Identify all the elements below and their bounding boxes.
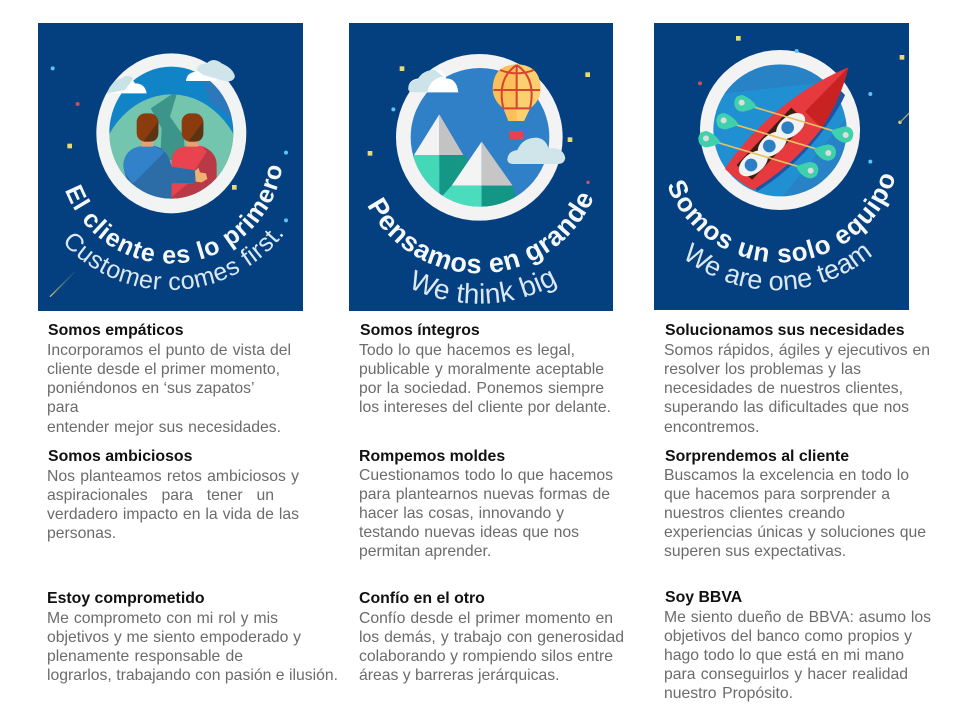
- subheading: We are one team: We are one team: [686, 242, 872, 290]
- text block: Somos ambiciosos: aspiracionales para tener un: [47, 487, 274, 504]
- subheading: We think big: We think big: [413, 270, 558, 304]
- text block: Rompemos moldes: hacer las cosas, innovando y: [359, 505, 564, 522]
- text block: Confío en el otro: colaborando y rompiendo silos entre: [359, 648, 613, 665]
- subheading: Customer comes first: Customer comes first.: [66, 230, 284, 290]
- text block: Solucionamos sus necesidades: superando las dificultades que nos: [664, 399, 909, 416]
- text block: Somos empáticos: Somos empáticos: [48, 322, 184, 339]
- text block: Estoy comprometido: objetivos y me siento empoderado y: [47, 629, 301, 646]
- text block: Soy BBVA: Soy BBVA: [665, 589, 742, 606]
- text block: Estoy comprometido: Me comprometo con mi rol y mis: [47, 610, 278, 627]
- text block: Sorprendemos al cliente: experiencias únicas y soluciones que: [664, 524, 926, 541]
- text block: Sorprendemos al cliente: superen sus expectativas.: [664, 543, 846, 560]
- heading: Pensamos en grande: Pensamos en grande: [368, 194, 592, 274]
- text block: Sorprendemos al cliente: [664, 448, 926, 560]
- text block: Somos ambiciosos: personas.: [47, 525, 116, 542]
- text block: Somos ambiciosos: verdadero impacto en la vida de las: [47, 506, 299, 523]
- text block: Solucionamos sus necesidades: Somos rápidos, ágiles y ejecutivos en: [664, 342, 930, 359]
- text block: Estoy comprometido: Estoy comprometido: [47, 590, 205, 607]
- text block: Somos ambiciosos: [47, 448, 299, 542]
- icon: mountains and balloon illustration: [368, 54, 590, 221]
- heading: Somos un solo equipo: Somos un solo equipo: [668, 174, 894, 263]
- text block: Rompemos moldes: [359, 448, 613, 560]
- text block: Somos empáticos: para: [47, 399, 79, 416]
- subheading: We think big: [413, 270, 558, 304]
- text block: Rompemos moldes: permitan aprender.: [359, 543, 491, 560]
- text block: Soy BBVA: objetivos del banco como propios y: [664, 628, 912, 645]
- text block: Sorprendemos al cliente: Sorprendemos al cliente: [665, 448, 849, 465]
- text block: Somos íntegros: los intereses del cliente por delante.: [359, 399, 611, 416]
- text block: Estoy comprometido: [47, 590, 338, 684]
- text block: Somos empáticos: [47, 322, 291, 436]
- text block: Rompemos moldes: Rompemos moldes: [359, 448, 505, 465]
- text block: Estoy comprometido: plenamente responsable de: [47, 648, 243, 665]
- text block: Somos empáticos: poniéndonos en ‘sus zapatos’: [47, 380, 255, 397]
- text block: Somos ambiciosos: Nos planteamos retos ambiciosos y: [47, 468, 299, 485]
- panel: Pensamos en grande: [349, 23, 613, 311]
- text block: Somos empáticos: Incorporamos el punto de vista del: [47, 342, 291, 359]
- text block: Solucionamos sus necesidades: necesidades de nuestros clientes,: [664, 380, 903, 397]
- icon: customers illustration: [50, 53, 288, 297]
- text block: Soy BBVA: para conseguirlos y hacer realidad: [664, 666, 908, 683]
- text block: Somos íntegros: [359, 322, 611, 416]
- text block: Confío en el otro: Confío desde el primer momento en: [359, 610, 613, 627]
- text block: Sorprendemos al cliente: Buscamos la excelencia en todo lo: [664, 467, 909, 484]
- text block: Confío en el otro: [359, 590, 624, 684]
- text block: Sorprendemos al cliente: que hacemos para sorprender a: [664, 486, 890, 503]
- text block: Somos empáticos: cliente desde el primer momento,: [47, 361, 280, 378]
- text block: Rompemos moldes: para plantearnos nuevas formas de: [359, 486, 610, 503]
- text block: Soy BBVA: hago todo lo que está en mi mano: [664, 647, 904, 664]
- text block: Solucionamos sus necesidades: [664, 322, 930, 436]
- text block: Somos íntegros: publicable y moralmente aceptable: [359, 361, 604, 378]
- text block: Solucionamos sus necesidades: encontremos.: [664, 419, 759, 436]
- text block: Confío en el otro: los demás, y trabajo con generosidad: [359, 629, 624, 646]
- text block: Somos íntegros: Somos íntegros: [360, 322, 480, 339]
- panel: Somos un solo equipo: [654, 23, 909, 310]
- icon: rowing boat illustration: [698, 36, 910, 210]
- text block: Rompemos moldes: testando nuevas ideas que nos: [359, 524, 579, 541]
- text block: Soy BBVA: [664, 589, 931, 702]
- text block: Sorprendemos al cliente: nuestros clientes creando: [664, 505, 845, 522]
- text block: Soy BBVA: Me siento dueño de BBVA: asumo los: [664, 609, 931, 626]
- text block: Somos íntegros: por la sociedad. Ponemos siempre: [359, 380, 604, 397]
- text block: Solucionamos sus necesidades: Solucionamos sus necesidades: [665, 322, 905, 339]
- panel: El cliente es lo primero: [38, 23, 303, 311]
- heading: El cliente es lo primero: El cliente es lo primero: [65, 166, 282, 264]
- text block: Confío en el otro: Confío en el otro: [359, 590, 485, 607]
- text block: Estoy comprometido: lograrlos, trabajando con pasión e ilusión.: [47, 667, 338, 684]
- text block: Somos empáticos: entender mejor sus necesidades.: [47, 419, 281, 436]
- text block: Confío en el otro: áreas y barreras jerárquicas.: [359, 667, 559, 684]
- text block: Rompemos moldes: Cuestionamos todo lo que hacemos: [359, 467, 613, 484]
- text block: Somos ambiciosos: Somos ambiciosos: [48, 448, 192, 465]
- text block: Soy BBVA: nuestro Propósito.: [664, 685, 793, 702]
- text block: Solucionamos sus necesidades: resolver los problemas y las: [664, 361, 861, 378]
- text block: Somos íntegros: Todo lo que hacemos es legal,: [359, 342, 575, 359]
